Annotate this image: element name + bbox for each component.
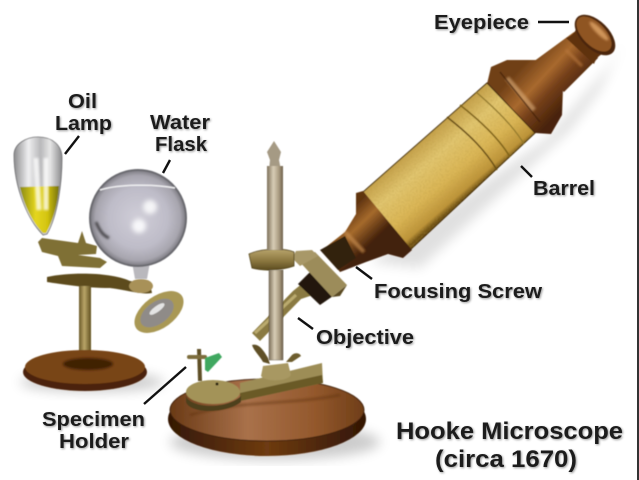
label: Oil Lamp: Lamp (55, 112, 112, 135)
soft shadow of barrel (370, 40, 625, 268)
label: Focusing Screw: Focusing Screw (374, 280, 542, 303)
label: Specimen Holder: Holder (59, 430, 129, 453)
title: Hooke Microscope (396, 418, 623, 445)
brass slide plate (240, 363, 323, 401)
oil lamp (14, 137, 62, 235)
focusing block and objective (249, 249, 347, 341)
label: Oil Lamp (55, 90, 112, 135)
microscope barrel assembly (320, 7, 625, 272)
shadow (170, 424, 380, 460)
lower barrel collar (322, 191, 412, 272)
stand plate (47, 274, 152, 293)
leader lines (65, 22, 569, 404)
pillar foot (261, 363, 291, 380)
label: Objective: Objective (316, 326, 414, 349)
stand post (79, 286, 91, 356)
label: Water Flask: Flask (155, 133, 208, 156)
title (396, 418, 623, 473)
label: Water Flask: Water (150, 111, 210, 134)
label: Oil Lamp: Oil (68, 90, 97, 113)
oil lamp stand (14, 137, 191, 392)
label: Barrel: Barrel (533, 177, 595, 200)
icon: eyepiece (533, 7, 623, 92)
label: Specimen Holder (42, 408, 145, 453)
label: Water Flask (150, 111, 210, 156)
stand shadow (20, 372, 164, 392)
microscope base (168, 345, 380, 460)
panel: gold barrel (363, 83, 535, 250)
label: Specimen Holder: Specimen (42, 408, 145, 431)
icon: focusing screw block (298, 252, 347, 297)
objective (252, 278, 322, 341)
water flask (90, 170, 186, 279)
title: (circa 1670) (435, 446, 577, 473)
brass knob (186, 396, 241, 411)
reflector dish (127, 283, 191, 341)
lamp arm (38, 231, 107, 268)
specimen holder post (197, 349, 202, 381)
label: Eyepiece: Eyepiece (434, 11, 529, 34)
upper barrel collar (487, 60, 563, 134)
wooden base (168, 382, 366, 456)
icon: green specimen (205, 353, 222, 372)
pillar (267, 141, 283, 360)
wood base (23, 353, 147, 391)
